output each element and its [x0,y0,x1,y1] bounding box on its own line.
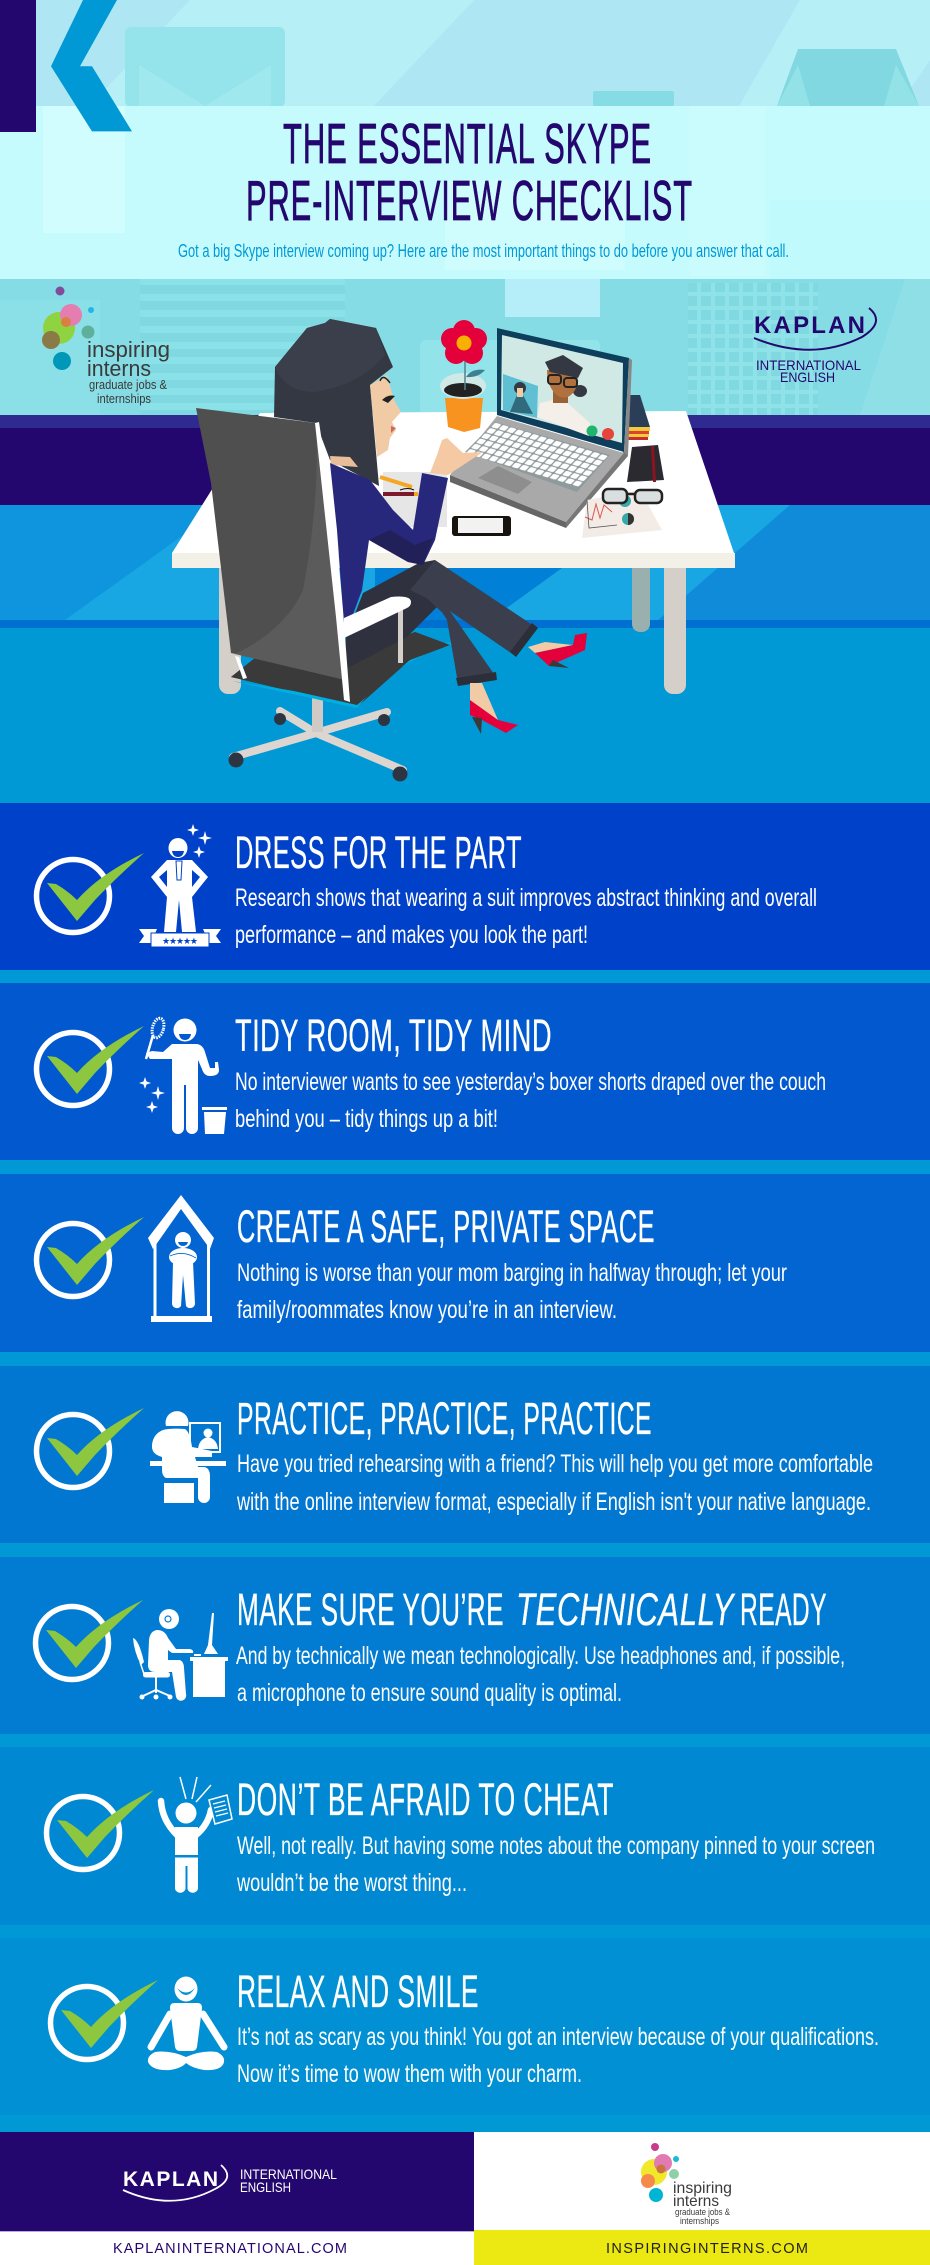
heading with italic word: MAKE SURE YOU’RE [237,1584,504,1635]
checkmark [36,853,144,932]
logo: Inspiring Interns (top): inspiring [87,337,170,362]
trousers [344,560,538,686]
body text: family/roommates know you’re in an interview. [237,1296,617,1324]
icon: man in suit on podium: ★★★★★ [162,936,198,946]
chair back and arm [196,408,411,702]
heading with italic word: READY [740,1584,827,1635]
desk [172,411,735,694]
heading with italic word: TECHNICALLY [516,1584,736,1635]
body text [236,1642,845,1707]
logo: Kaplan International English (top): KAPLAN [754,312,865,339]
panel: dress for the part [36,824,817,949]
glasses [603,489,662,503]
logo: Inspiring Interns (top): internships [97,391,151,406]
books [627,395,650,440]
woman [274,319,587,734]
panel: relax and smile [50,1966,879,2088]
logo: Kaplan: KAPLAN [123,2168,218,2191]
logo: Kaplan: ENGLISH [240,2179,291,2195]
back hair top [274,319,393,486]
icon: meditating person [148,1976,224,2070]
panel: safe private space [36,1195,787,1324]
illustration: woman at desk on a video call [172,319,735,782]
phone [452,516,511,536]
heading: TIDY ROOM, TIDY MIND [235,1010,552,1061]
icon: person in house [148,1195,214,1322]
laptop [450,328,632,528]
neck [330,456,358,467]
logo: Kaplan International English (top) [754,308,876,385]
face [370,375,401,457]
logo: Inspiring Interns: graduate jobs & [675,2207,731,2218]
icon: person with headset at computer [133,1609,228,1701]
body text: Now it’s time to wow them with your charm. [237,2060,582,2088]
body text [235,884,817,949]
url: INSPIRINGINTERNS.COM [606,2241,808,2257]
body text [236,1450,873,1516]
logo: Inspiring Interns [641,2143,732,2227]
checkmark [36,1408,144,1488]
small woman in video inset [510,382,533,414]
body text [236,1832,875,1897]
legs and shoes [470,633,587,734]
logo: Kaplan: INTERNATIONAL [240,2166,337,2182]
panel: practice [36,1393,873,1516]
chair seat [231,632,450,707]
heading: DRESS FOR THE PART [235,827,522,878]
checkmark [36,1026,144,1106]
url: KAPLANINTERNATIONAL.COM [113,2241,347,2257]
body text [237,2023,879,2088]
title [246,112,693,233]
plant [440,320,487,432]
chair [228,632,452,782]
body text: a microphone to ensure sound quality is optimal. [237,1679,622,1707]
jacket [330,463,448,625]
icon: man in suit on podium [139,824,221,947]
footer: Inspiring Interns [474,2132,930,2265]
chart paper [582,490,662,538]
checkmark [36,1217,144,1296]
header background [0,0,930,803]
panel: tidy room [36,1010,826,1134]
logo: Kaplan International English (top): ENGLISH [780,369,835,385]
heading: DON’T BE AFRAID TO CHEAT [237,1774,614,1825]
logo: Inspiring Interns: inspiring [673,2180,732,2197]
chair base [228,698,408,782]
Kaplan K mark [0,0,132,132]
logo: Inspiring Interns (top): graduate jobs & [89,377,167,392]
icon: person cleaning [139,1017,227,1134]
hand [430,438,483,475]
checkmark [50,1980,158,2060]
logo: Inspiring Interns: internships [680,2216,719,2227]
logo: Kaplan [123,2165,337,2201]
logo: Inspiring Interns (top) [42,286,170,406]
notebook [627,445,664,482]
icon: person at desk practising [150,1411,226,1503]
body text: performance – and makes you look the part! [235,921,588,949]
footer: Kaplan [0,2132,474,2265]
body text [235,1068,826,1133]
body text: behind you – tidy things up a bit! [235,1105,498,1133]
body text [237,1259,787,1324]
body text: wouldn’t be the worst thing... [236,1869,467,1897]
interviewer on screen [537,355,590,436]
checkmark [36,1600,143,1680]
checkmark [46,1790,154,1870]
panel: afraid to cheat [46,1774,875,1897]
logo: Inspiring Interns (top): interns [87,356,151,381]
logo: Inspiring Interns: interns [673,2193,719,2210]
panel: technically ready [36,1584,845,1707]
logo: Kaplan International English (top): INTERNATIONAL [756,357,861,373]
icon: person with notes [161,1777,232,1893]
desk papers and pencils [380,472,447,527]
heading: RELAX AND SMILE [237,1966,479,2017]
panels background [0,803,930,2132]
